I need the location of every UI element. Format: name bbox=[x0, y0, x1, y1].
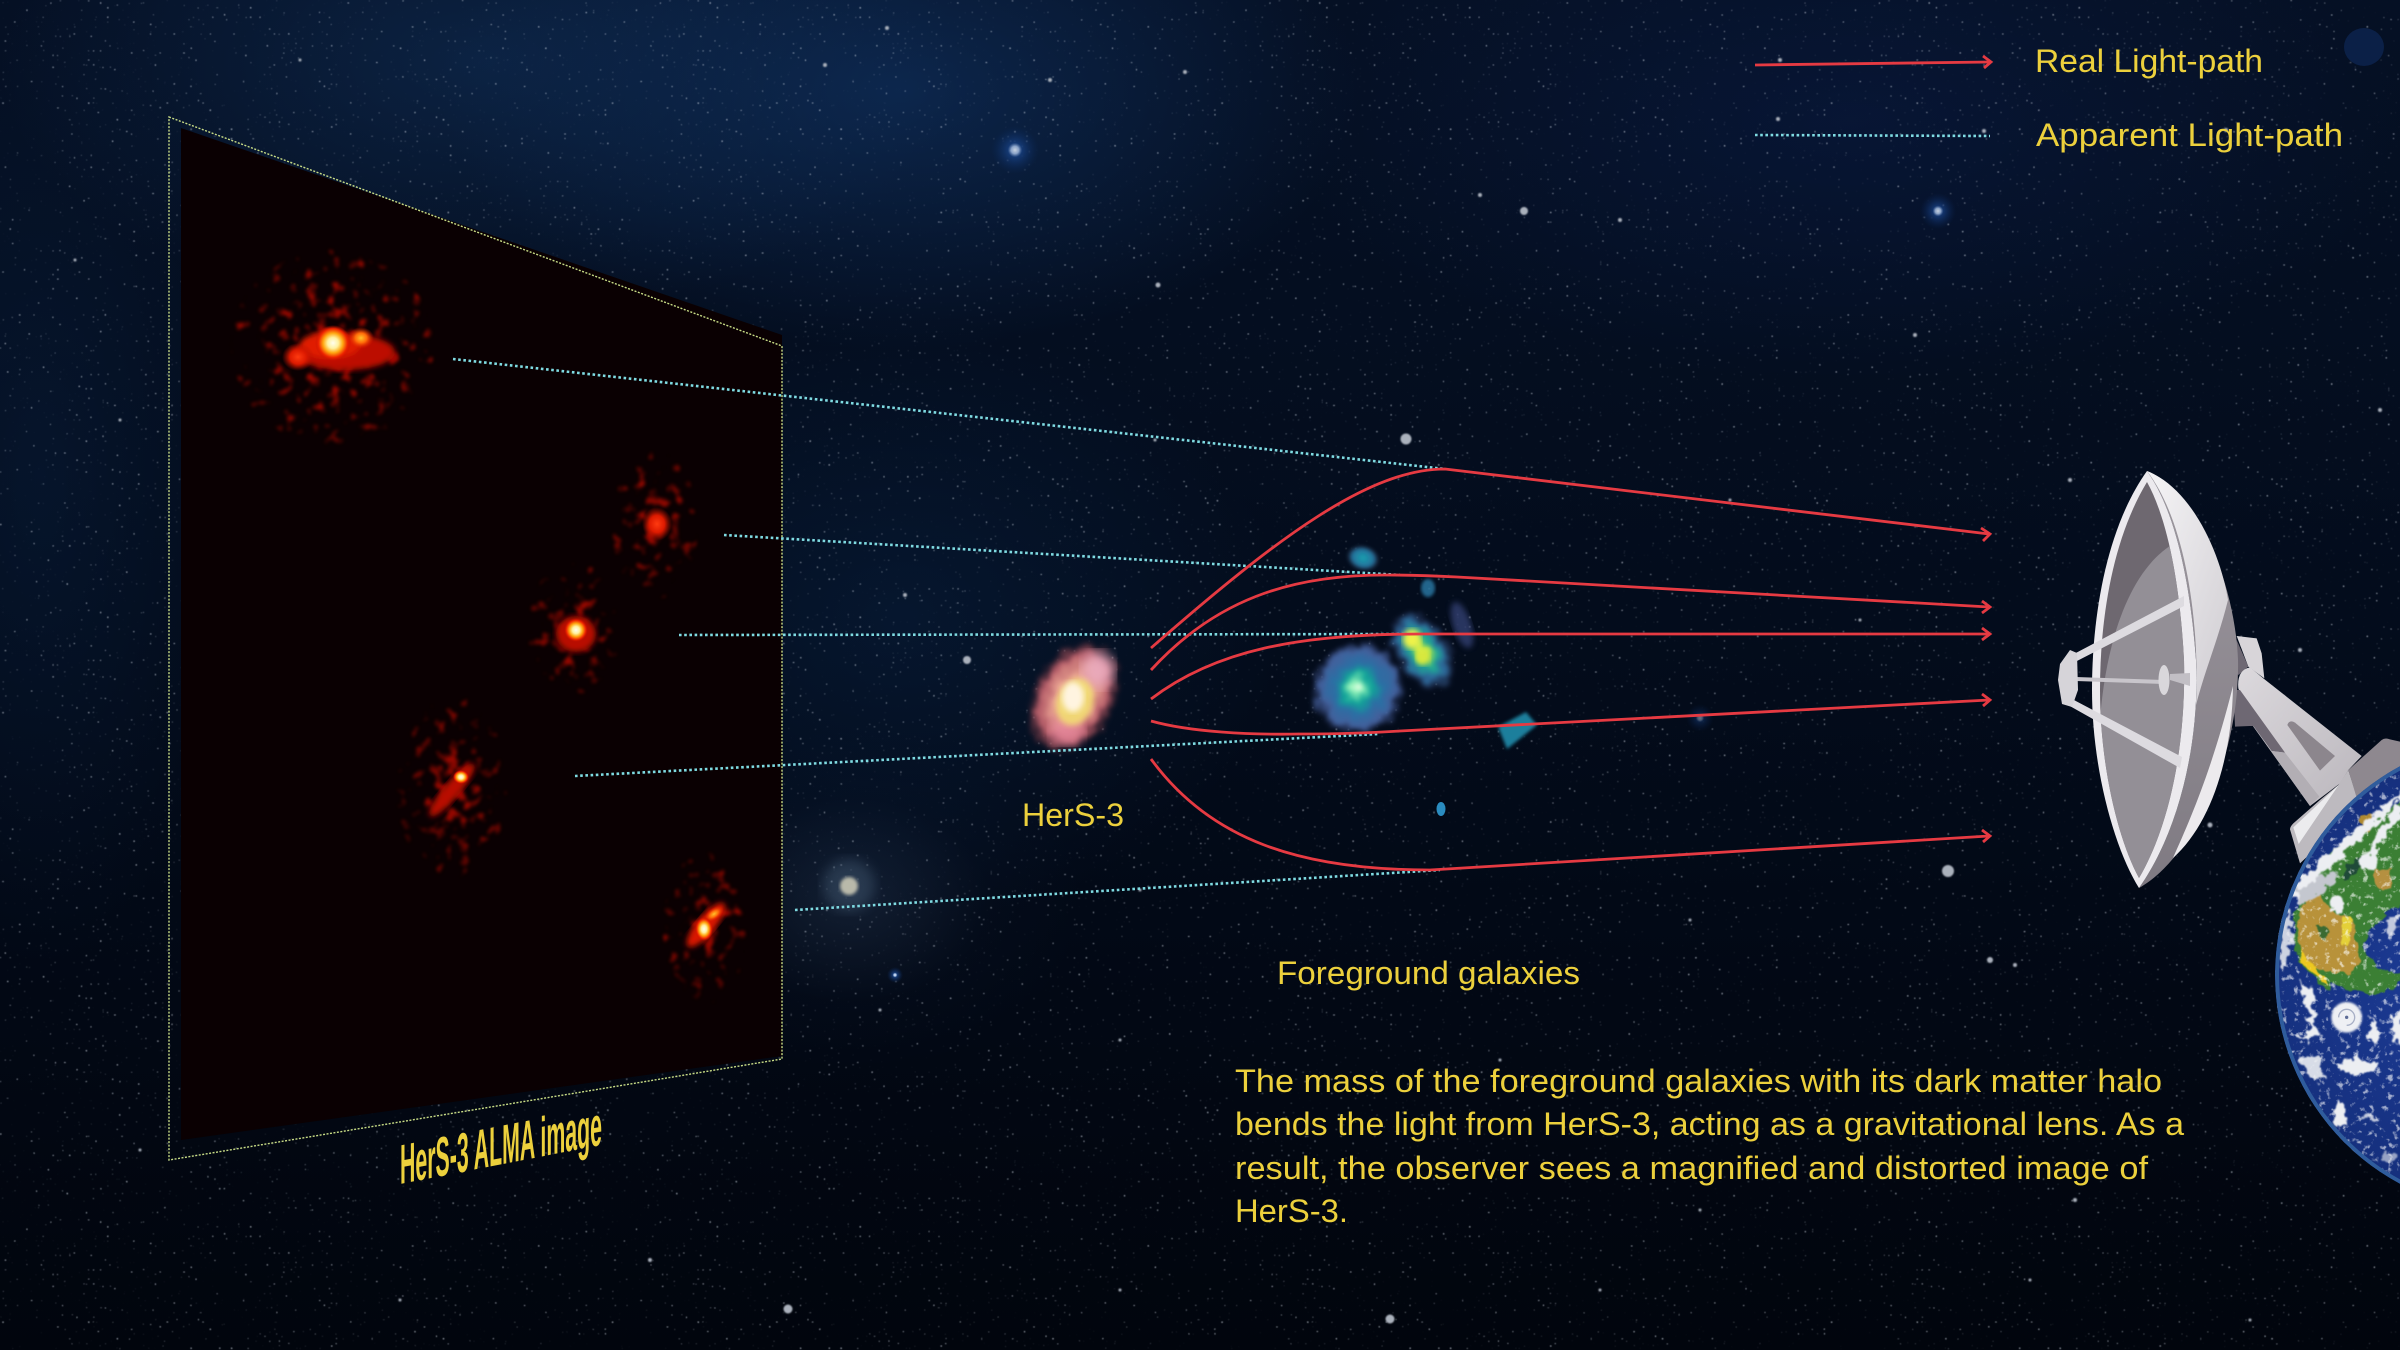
small galaxy lower bbox=[1436, 802, 1446, 816]
galaxy: HerS-3 bbox=[1009, 624, 1139, 770]
label: foreground galaxies: Foreground galaxies bbox=[1277, 955, 1580, 991]
foreground galaxies bbox=[1296, 541, 1537, 816]
lensed image C bbox=[526, 560, 622, 696]
mount arm bbox=[2233, 667, 2362, 806]
small galaxy near pair bbox=[1421, 579, 1435, 597]
telescope mount bbox=[2233, 636, 2400, 863]
cloud systems bbox=[2280, 790, 2400, 1161]
light path 2 bbox=[1151, 575, 1990, 670]
legend: real light path arrow bbox=[1755, 56, 1991, 68]
small galaxy right bbox=[1498, 712, 1537, 749]
legend bbox=[1755, 43, 2343, 153]
mount base bbox=[2290, 738, 2400, 863]
foreground galaxy 2 bbox=[1376, 599, 1468, 703]
light path 3 bbox=[1151, 628, 1990, 699]
explanation paragraph: bends the light from HerS-3, acting as a gravitational lens. As a bbox=[1235, 1106, 2184, 1142]
panel: HerS-3 ALMA image bbox=[169, 117, 782, 1196]
apparent light paths bbox=[453, 359, 1445, 910]
legend: apparent light path line bbox=[1755, 135, 1990, 136]
dish rim bbox=[2092, 471, 2197, 888]
label: HerS-3: HerS-3 bbox=[1022, 797, 1124, 833]
hurricane bbox=[2331, 1002, 2362, 1033]
explanation paragraph: HerS-3. bbox=[1235, 1193, 1348, 1229]
legend: apparent light path label: Apparent Light-path bbox=[2036, 117, 2343, 153]
sub-reflector bbox=[2058, 650, 2078, 707]
panel image background bbox=[181, 128, 782, 1140]
lensed image B bbox=[611, 449, 699, 601]
dish upper highlight bbox=[2147, 471, 2228, 705]
explanation paragraph bbox=[1235, 1063, 2184, 1229]
explanation paragraph: result, the observer sees a magnified and distorted image of bbox=[1235, 1150, 2148, 1186]
dish lower crescent bbox=[2173, 686, 2233, 858]
mount bracket bbox=[2235, 636, 2264, 678]
explanation paragraph: The mass of the foreground galaxies with its dark matter halo bbox=[1235, 1063, 2162, 1099]
lensed image E bbox=[662, 850, 748, 1006]
radio telescope bbox=[2058, 470, 2400, 890]
sub-reflector struts bbox=[2068, 596, 2184, 768]
dark blue disc, top right bbox=[2344, 28, 2384, 66]
legend: real light path label: Real Light-path bbox=[2035, 43, 2263, 79]
light path 1 bbox=[1151, 469, 1990, 648]
light path 5 bbox=[1151, 759, 1990, 870]
feed horn bbox=[2158, 665, 2190, 695]
land: North America bbox=[2293, 800, 2400, 993]
dish back bbox=[2139, 471, 2238, 888]
panel outline bbox=[169, 117, 782, 1160]
lensed image A bbox=[228, 247, 436, 447]
atmosphere rim bbox=[2277, 740, 2400, 1210]
small purple galaxy bbox=[1446, 599, 1478, 651]
bright blue stars bbox=[823, 126, 1956, 983]
earth bbox=[2275, 766, 2400, 1184]
real light paths bbox=[1151, 469, 1990, 870]
lensed image D bbox=[396, 691, 508, 885]
light path 4 bbox=[1151, 694, 1990, 734]
small galaxy upper bbox=[1343, 541, 1383, 575]
cloud texture bbox=[2275, 775, 2400, 1174]
panel: HerS-3 ALMA image: HerS-3 ALMA image bbox=[400, 1094, 602, 1196]
dish face bbox=[2100, 482, 2184, 878]
foreground galaxy 1 bbox=[1296, 625, 1420, 751]
